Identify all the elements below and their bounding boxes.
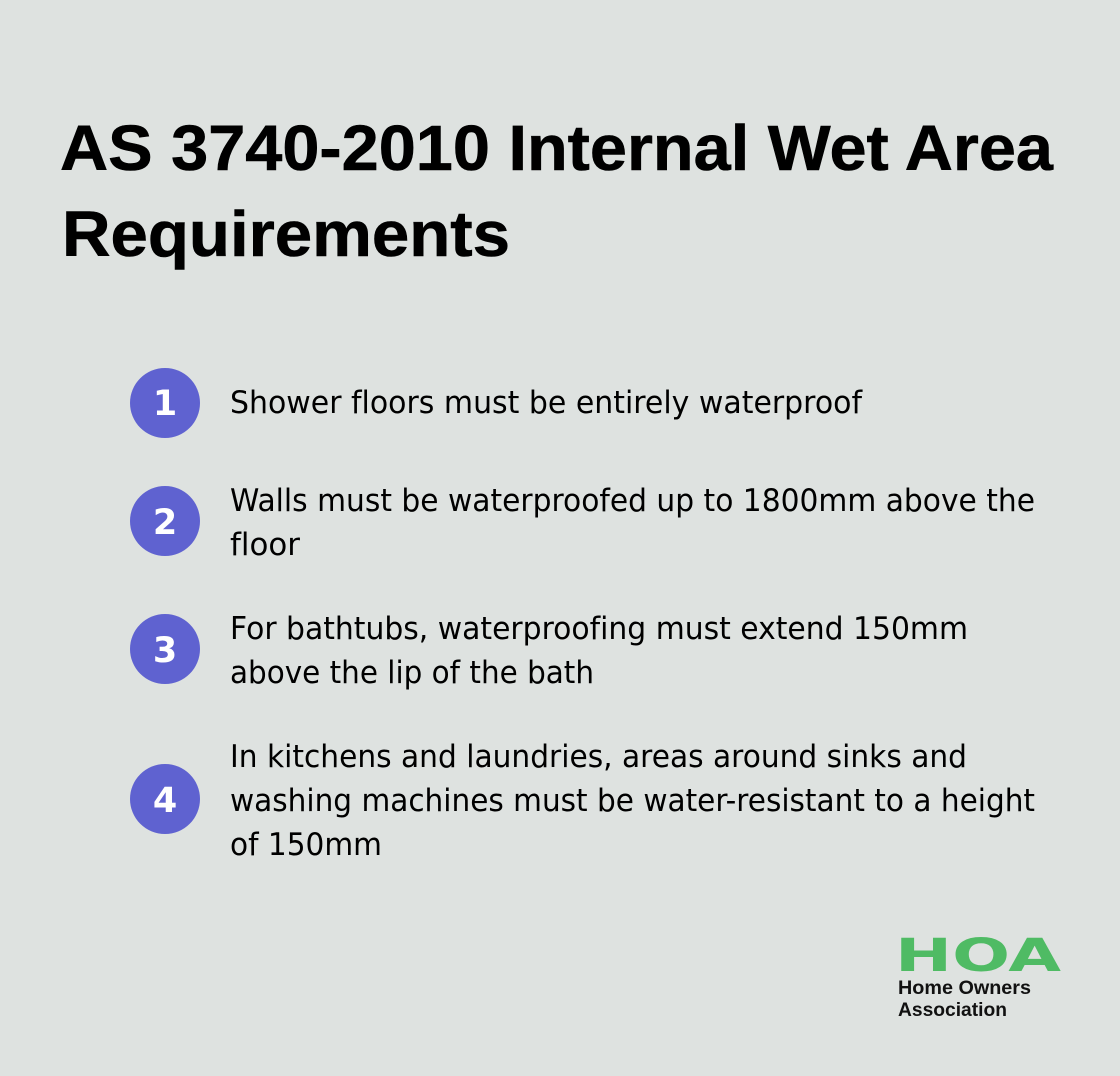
item 4 text xyxy=(230,739,1035,863)
item 3 text: For bathtubs, waterproofing must extend 150mm xyxy=(230,611,968,647)
number badge 1 xyxy=(130,368,200,438)
list item 4 xyxy=(130,739,1035,863)
number badge 2 xyxy=(130,486,200,556)
logo: HOA Home Owners Association: HOA xyxy=(895,929,1061,982)
number badge 3: 3 xyxy=(153,631,177,671)
item 2 text xyxy=(230,483,1035,563)
list item 3 xyxy=(130,611,968,691)
item 2 text: Walls must be waterproofed up to 1800mm above the xyxy=(230,483,1035,519)
logo: HOA Home Owners Association xyxy=(895,929,1061,1021)
number badge 3 xyxy=(130,614,200,684)
item 3 text: above the lip of the bath xyxy=(230,655,594,691)
number badge 1: 1 xyxy=(153,384,177,424)
title: Requirements xyxy=(62,198,510,270)
item 2 text: floor xyxy=(230,527,300,563)
logo: HOA Home Owners Association: Association xyxy=(898,1000,1007,1021)
number badge 4 xyxy=(130,764,200,834)
item 1 text: Shower floors must be entirely waterproof xyxy=(230,385,863,421)
title: AS 3740-2010 Internal Wet Area xyxy=(60,112,1053,184)
item 3 text xyxy=(230,611,968,691)
list item 1 xyxy=(130,368,863,438)
logo: HOA Home Owners Association: Home Owners xyxy=(898,978,1031,999)
item 4 text: In kitchens and laundries, areas around sinks and xyxy=(230,739,967,775)
title xyxy=(60,112,1053,270)
number badge 2: 2 xyxy=(153,503,177,543)
list item 2 xyxy=(130,483,1035,563)
number badge 4: 4 xyxy=(153,781,177,821)
item 4 text: of 150mm xyxy=(230,827,382,863)
item 4 text: washing machines must be water-resistant to a height xyxy=(230,783,1035,819)
